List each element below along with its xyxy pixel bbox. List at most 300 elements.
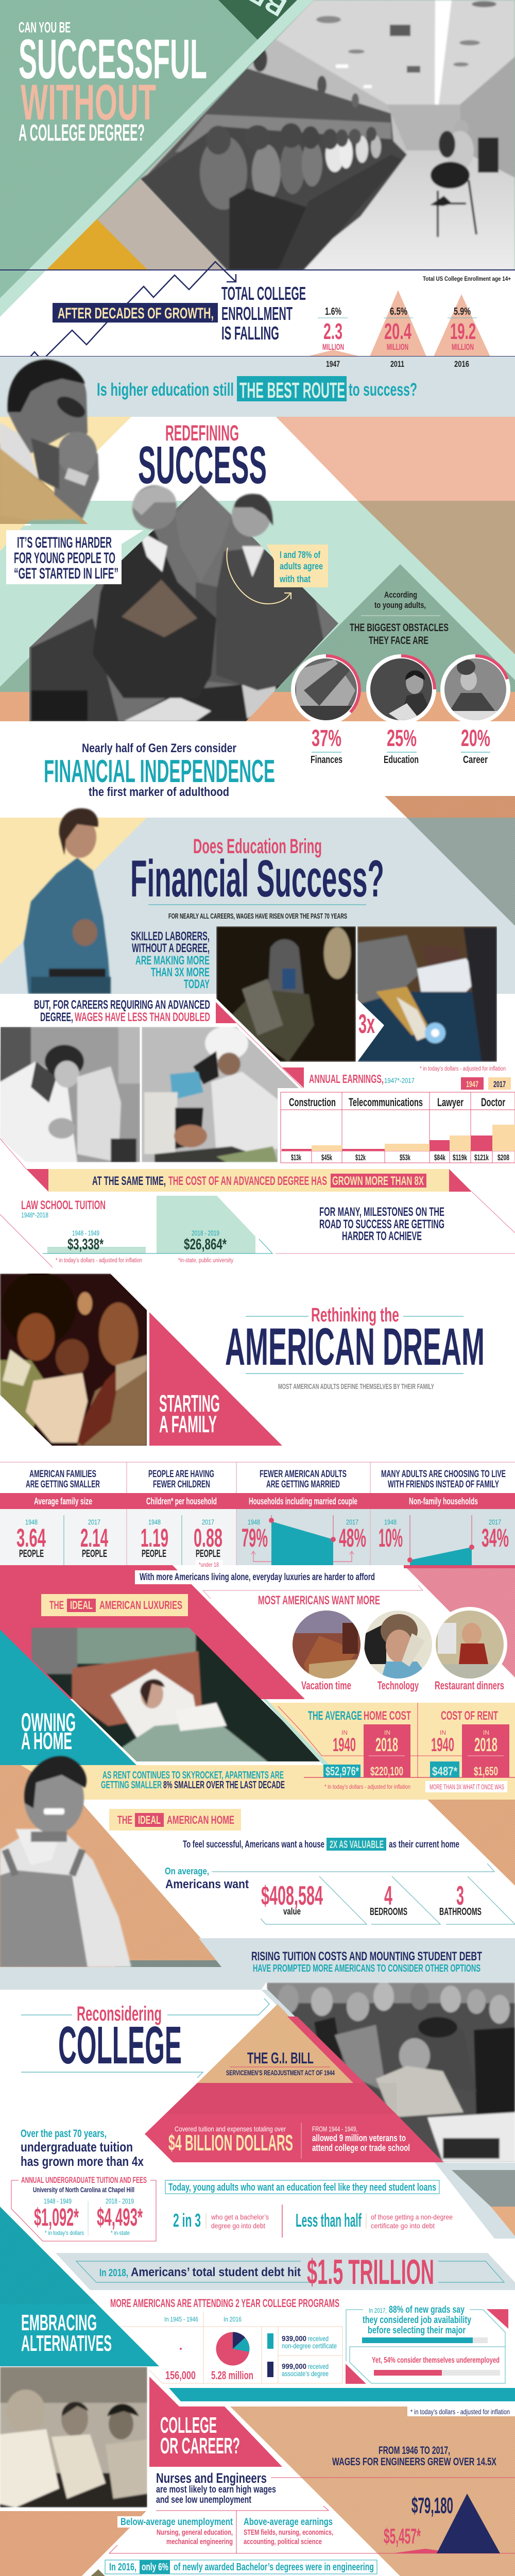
family statistics table: Non-family households: [409, 1496, 478, 1506]
owning a home label: [21, 1708, 76, 1754]
heading: COLLEGE: [58, 2015, 182, 2075]
nurses and engineers: Nursing, general education,: [157, 2528, 233, 2537]
hero title: WITHOUT: [21, 74, 156, 130]
advanced degree statement: [34, 998, 210, 1024]
stat: children per household: 0.88: [194, 1523, 222, 1552]
stat: children per household: PEOPLE: [196, 1548, 220, 1560]
owning a home label: A HOME: [21, 1727, 72, 1754]
photo: two men talking: [26, 484, 345, 726]
two-year programs chart: associate’s degree: [282, 2369, 329, 2378]
engineer wage statement: [332, 2445, 496, 2468]
two-year programs chart: [110, 2297, 342, 2383]
annual earnings bar chart: $119k: [453, 1154, 467, 1162]
obstacle: career: [440, 654, 510, 766]
tuition table: $4,493*: [97, 2204, 143, 2231]
family statistics table: FEWER AMERICAN ADULTS: [260, 1469, 347, 1480]
white strip: [0, 721, 515, 818]
annual earnings bar chart: 2017: [493, 1079, 506, 1089]
engineering degrees statement: [105, 2560, 377, 2574]
photo: welder in the dark: [216, 926, 356, 1062]
stat: married households area chart: 1948: [248, 1518, 260, 1526]
stat: family size: [16, 1518, 108, 1560]
obstacles text: THEY FACE ARE: [369, 635, 428, 647]
stat: married households area chart: 2017: [346, 1518, 358, 1526]
cost banner: GROWN MORE THAN 8X: [332, 1174, 424, 1188]
ideal luxuries label: THE: [49, 1599, 64, 1612]
advanced degree statement: DEGREE,: [40, 1010, 73, 1024]
G.I. Bill pyramid: Covered tuition and expenses totaling over: [175, 2125, 286, 2133]
heading: Rethinking the: [311, 1304, 399, 1326]
annual earnings bar chart: $12k: [355, 1154, 366, 1162]
job availability panel: before selecting their major: [368, 2325, 466, 2336]
enrollment stats: 2.3: [323, 319, 342, 344]
rent statement: GETTING SMALLER: [101, 1780, 162, 1791]
redefining success panel: [0, 360, 515, 818]
hero panel: SUCCESSFUL: [19, 28, 207, 91]
financial independence statement: Nearly half of Gen Zers consider: [82, 741, 236, 755]
photo: family portrait: [0, 1272, 149, 1449]
question text: THE BEST ROUTE: [239, 378, 345, 403]
tuition table: * in-state: [111, 2229, 130, 2236]
stat: family size: PEOPLE: [82, 1548, 107, 1560]
two-year programs chart: 999,000: [282, 2362, 306, 2371]
skilled laborers text: WITHOUT A DEGREE,: [132, 941, 210, 955]
annual earnings bar chart: 1947*-2017: [384, 1076, 415, 1084]
enrollment panel: [0, 262, 515, 357]
law school tuition chart: LAW SCHOOL TUITION: [21, 1198, 106, 1212]
ideal home panel: [0, 1747, 515, 1990]
stat: family size: 1948: [25, 1518, 38, 1526]
stat: non-family households area chart: 1948: [384, 1518, 397, 1526]
photo: student in denim shirt: [24, 808, 111, 994]
tuition table: [11, 2175, 156, 2241]
two-year programs chart: 939,000: [282, 2334, 306, 2343]
G.I. Bill pyramid: SERVICEMEN’S READJUSTMENT ACT OF 1944: [226, 2069, 335, 2077]
milestones statement: FOR MANY, MILESTONES ON THE: [319, 1205, 444, 1219]
yellow triangle: [46, 219, 148, 270]
ideal luxuries label: IDEAL: [70, 1599, 93, 1612]
pink wedge accent: [0, 1002, 515, 1267]
callout: 78% agree: I and 78% of: [280, 550, 321, 560]
callout: 78% agree: [267, 545, 328, 587]
owning a home label: OWNING: [21, 1708, 76, 1737]
family statistics table: PEOPLE ARE HAVING: [148, 1469, 214, 1480]
stat: married households area chart: [242, 1515, 366, 1565]
tan textile triangle: [41, 179, 227, 270]
rent callout: [425, 1781, 507, 1792]
engineer wages triangles: [384, 2493, 500, 2553]
annual earnings bar chart: [281, 1066, 515, 1163]
law school tuition chart: $26,864*: [184, 1236, 227, 1253]
statement: living alone: [135, 1570, 375, 1584]
job availability panel: In 2017,: [369, 2307, 387, 2314]
americans want stats: BATHROOMS: [439, 1906, 482, 1918]
enrollment stats: [318, 306, 477, 352]
family statistics table: FEWER CHILDREN: [153, 1479, 210, 1490]
nurses and engineers: STEM fields, nursing, economics,: [244, 2528, 333, 2537]
photo: modern microscope scientist: [142, 1026, 301, 1162]
job availability panel: 88% of new grads say: [389, 2304, 465, 2315]
G.I. Bill pyramid: FROM 1944 - 1949,: [312, 2125, 357, 2133]
home cost heading: [308, 1709, 498, 1723]
stat: family size: PEOPLE: [19, 1548, 44, 1560]
headline continuation: IS FALLING: [221, 323, 279, 344]
enrollment stats: 5.9%: [454, 306, 471, 317]
inflation note: * in today’s dollars - adjusted for inflation: [324, 1783, 410, 1790]
home cost columns: IN: [384, 1729, 390, 1736]
obstacles text: to young adults,: [374, 600, 426, 610]
nurses and engineers: Above-average earnings: [244, 2517, 333, 2528]
stat: family size: 3.64: [16, 1523, 46, 1552]
nurses and engineers: Below-average unemployment: [121, 2517, 233, 2528]
diagonal mint band: [0, 0, 314, 317]
obstacles text: [350, 590, 449, 647]
americans want stats: BEDROOMS: [370, 1906, 407, 1918]
enrollment triangles chart: [307, 290, 490, 357]
photo: man with sunglasses: [0, 360, 99, 520]
tuition statement: [21, 2128, 144, 2169]
statement: living alone: With more Americans living alone, everyday luxuries are harder to afford: [140, 1572, 375, 1583]
photo: welder with torch: [91, 2569, 105, 2576]
statement: 2x as valuable: [183, 1838, 459, 1851]
question text: Is higher education still: [97, 380, 234, 400]
zigzag arrow: [30, 262, 236, 357]
skilled laborers text: [131, 929, 210, 991]
two-year programs chart: In 2016: [224, 2315, 242, 2323]
obstacle: finances: 37%: [312, 725, 341, 751]
debt stat: 2 in 3: [173, 2210, 269, 2231]
luxury: technology: Technology: [377, 1679, 419, 1692]
stat: children per household: 1.19: [141, 1523, 168, 1552]
headline box: AFTER DECADES OF GROWTH,: [58, 305, 214, 322]
stat: married households area chart: 48%: [339, 1523, 366, 1552]
home cost columns: $1,650: [474, 1765, 498, 1778]
engineering degrees statement: In 2016,: [109, 2562, 136, 2573]
stat: non-family households area chart: 10%: [379, 1523, 403, 1552]
skilled laborers text: SKILLED LABORERS,: [131, 929, 210, 943]
two-year programs chart: received: [308, 2334, 329, 2343]
obstacle: education: Education: [384, 754, 419, 766]
tuition table: * in today’s dollars: [45, 2229, 84, 2236]
stat: family size: 2017: [88, 1518, 100, 1526]
question text: [97, 376, 417, 403]
stat: non-family households area chart: [379, 1515, 509, 1565]
nurses and engineers: accounting, political science: [244, 2537, 322, 2546]
G.I. Bill pyramid: THE G.I. BILL: [247, 2049, 314, 2067]
tuition table: ANNUAL UNDERGRADUATE TUITION AND FEES: [21, 2175, 147, 2185]
annual earnings bar chart: Lawyer: [437, 1096, 464, 1109]
debt stat: less than half: of those getting a non-degree: [371, 2213, 453, 2221]
callout: getting started: “GET STARTED IN LIFE”: [14, 565, 118, 582]
hero title: CAN YOU BE: [19, 20, 71, 36]
home cost columns: IN: [440, 1729, 446, 1736]
debt stat: less than half: certificate go into debt: [371, 2222, 435, 2230]
enrollment stats: MILLION: [387, 342, 408, 352]
tuition table: 2018 - 2019: [106, 2197, 134, 2205]
law school tuition chart: [21, 1196, 272, 1264]
hero panel: [0, 0, 515, 269]
home cost columns: [323, 1724, 509, 1778]
hero title: [19, 20, 207, 146]
headline box: [53, 303, 218, 323]
advanced degree statement: BUT, FOR CAREERS REQUIRING AN ADVANCED: [34, 998, 210, 1012]
men heads above the photo cut: [132, 485, 273, 582]
americans want stats: 3: [456, 1881, 464, 1911]
debt stat: 2 in 3: who get a bachelor’s: [211, 2213, 269, 2221]
engineering degrees statement: only 6%: [142, 2562, 168, 2573]
law school tuition chart: *in-state, public university: [178, 1258, 233, 1264]
headline continuation: ENROLLMENT: [221, 303, 293, 324]
cost banner: THE COST OF AN ADVANCED DEGREE HAS: [168, 1174, 327, 1188]
obstacle: career: 20%: [461, 725, 490, 751]
heading: SUCCESS: [138, 435, 267, 495]
annual earnings bar chart: $45k: [321, 1154, 332, 1162]
stat: children per household: 2017: [202, 1518, 214, 1526]
photo: three men at a chalkboard: [0, 2367, 147, 2507]
obstacle: career: Career: [463, 754, 488, 766]
callout: getting started: [6, 530, 144, 584]
financial independence statement: [44, 741, 275, 799]
engineer wage statement: FROM 1946 TO 2017,: [379, 2445, 450, 2456]
americans want stats: Americans want: [165, 1877, 249, 1891]
americans want stats: $408,584: [261, 1881, 323, 1911]
photo: vintage microscope scientist: [0, 1027, 140, 1162]
skilled laborers text: TODAY: [184, 977, 210, 991]
heading: most americans want more: MOST AMERICANS WANT MORE: [258, 1594, 380, 1607]
job availability panel: they considered job availability: [363, 2315, 471, 2326]
cost banner: AT THE SAME TIME,: [92, 1174, 166, 1188]
law school tuition chart: 2018 - 2019: [192, 1229, 219, 1237]
obstacle: finances: Finances: [311, 754, 342, 766]
tuition statement: has grown more than 4x: [21, 2154, 144, 2169]
enrollment stats: MILLION: [452, 342, 474, 352]
callout: getting started: FOR YOUNG PEOPLE TO: [14, 550, 115, 567]
tuition statement: undergraduate tuition: [21, 2139, 133, 2155]
annual earnings bar chart: $53k: [400, 1154, 410, 1162]
ideal luxuries label: AMERICAN LUXURIES: [99, 1599, 182, 1612]
white lower area: [0, 994, 515, 1274]
engineering degrees statement: of newly awarded Bachelor’s degrees were in engineering: [174, 2562, 374, 2573]
section label: ALTERNATIVES: [21, 2331, 112, 2356]
G.I. Bill pyramid: [145, 2004, 443, 2162]
family statistics table: [0, 1462, 515, 1565]
annual earnings bar chart: $13k: [291, 1154, 301, 1162]
american dream panel: [0, 1272, 485, 1449]
annual earnings bar chart: ANNUAL EARNINGS,: [309, 1072, 384, 1086]
heading: MOST AMERICAN ADULTS DEFINE THEMSELVES BY THEIR FAMILY: [278, 1383, 434, 1391]
law school tuition chart: 1948 - 1949: [72, 1229, 99, 1237]
home cost columns: $52,976*: [325, 1765, 359, 1778]
tuition statement: Over the past 70 years,: [21, 2128, 107, 2140]
cost banner: [26, 1169, 472, 1192]
heading: [138, 421, 267, 495]
callout: 78% agree: adults agree: [280, 561, 323, 571]
heading: [21, 1998, 269, 2078]
family statistics table: ARE GETTING SMALLER: [26, 1479, 100, 1490]
starting a family tab: STARTING: [159, 1390, 220, 1417]
starting a family tab: [149, 1312, 282, 1446]
headline continuation: [221, 283, 306, 344]
skilled laborers text: THAN 3X MORE: [151, 965, 210, 979]
annual earnings bar chart: $84k: [434, 1154, 445, 1162]
annual earnings bar chart: Construction: [289, 1096, 336, 1109]
reconsidering college panel: [11, 1982, 515, 2241]
americans want stats: value: [283, 1906, 301, 1917]
section label: EMBRACING: [21, 2310, 97, 2335]
family statistics table: Average family size: [34, 1496, 92, 1506]
skilled laborers text: ARE MAKING MORE: [135, 954, 210, 968]
G.I. Bill pyramid: $4 BILLION DOLLARS: [168, 2130, 293, 2156]
student debt band: [56, 2252, 515, 2292]
big 3x label: 3x: [358, 1009, 375, 1039]
rent statement: AS RENT CONTINUES TO SKYROCKET, APARTMENTS ARE: [102, 1770, 284, 1781]
nurses and engineers: mechanical engineering: [166, 2537, 233, 2546]
question text: to success?: [349, 380, 417, 400]
student debt band: In 2018,: [99, 2267, 128, 2279]
curved arrow: [227, 548, 291, 604]
obstacle: finances: [291, 654, 361, 766]
home cost columns: $220,100: [370, 1765, 403, 1778]
luxury: vacation time: [291, 1610, 363, 1692]
home cost panel: [0, 1699, 515, 1800]
section label: [21, 2310, 112, 2356]
stat: married households area chart: 79%: [242, 1523, 268, 1552]
enrollment stats: 6.5%: [390, 306, 407, 317]
obstacle: education: [366, 654, 436, 766]
callout: getting started: IT’S GETTING HARDER: [17, 534, 112, 551]
engineer wages triangles: $5,457*: [384, 2524, 421, 2548]
tuition table: 1948 - 1949: [44, 2197, 72, 2205]
student loans statement: [165, 2180, 439, 2194]
financial independence statement: the first marker of adulthood: [89, 785, 229, 799]
hero photo: switchboard operators: [140, 0, 515, 269]
question band: [0, 357, 515, 417]
rent statement: 8% SMALLER OVER THE LAST DECADE: [163, 1780, 285, 1791]
obstacles text: According: [384, 590, 417, 600]
debt stat: 2 in 3: degree go into debt: [211, 2222, 265, 2230]
home cost columns: $487*: [432, 1765, 458, 1778]
stat: children per household: [141, 1518, 222, 1560]
statement: 2x as valuable: To feel successful, Americans want a house: [183, 1839, 324, 1850]
college or career tab: OR CAREER?: [160, 2433, 240, 2459]
dark green corner triangle with rotated word: [218, 0, 297, 40]
hero title: A COLLEGE DEGREE?: [19, 120, 145, 146]
enrollment stats: 19.2: [450, 319, 476, 344]
two-year programs chart: non-degree certificate: [282, 2342, 337, 2350]
nurses and engineers: [109, 2470, 515, 2553]
stat: children per household: PEOPLE: [142, 1548, 166, 1560]
college or career tab: [149, 2377, 282, 2467]
nurses and engineers: Nurses and Engineers: [156, 2470, 267, 2486]
nurses and engineers: are most likely to earn high wages: [156, 2484, 276, 2495]
year labels: 2016: [454, 359, 469, 369]
annual earnings bar chart: $121k: [474, 1154, 489, 1162]
family statistics table: ARE GETTING MARRIED: [266, 1479, 340, 1490]
home cost heading: THE AVERAGE: [308, 1709, 362, 1723]
family statistics table: AMERICAN FAMILIES: [29, 1469, 96, 1480]
heading: [130, 835, 384, 908]
two-year programs chart: 5.28 million: [211, 2369, 253, 2382]
photo: welder close-up: [357, 926, 497, 1062]
year labels: 1947: [326, 359, 340, 369]
stat: family size: 2.14: [80, 1523, 108, 1552]
statement: 2x as valuable: 2X AS VALUABLE: [330, 1839, 384, 1851]
americans want stats: [165, 1863, 515, 1924]
americans want stats: On average,: [165, 1866, 209, 1876]
college or career panel: [0, 2367, 515, 2576]
enrollment stats: 1.6%: [325, 306, 341, 317]
year labels: [326, 359, 469, 369]
home cost columns: IN: [341, 1729, 348, 1736]
law school tuition chart: 1948*-2018: [21, 1211, 48, 1219]
annual earnings bar chart: 1947: [466, 1079, 478, 1089]
ideal luxuries label: [41, 1594, 188, 1616]
year labels: 2011: [390, 359, 404, 369]
G.I. Bill pyramid: allowed 9 million veterans to: [312, 2133, 406, 2143]
photo: FDR signing the G.I. Bill: [267, 1982, 515, 2163]
home cost heading: HOME COST: [364, 1709, 411, 1723]
callout: 78% agree: with that: [279, 574, 311, 584]
advanced degree statement: WAGES HAVE LESS THAN DOUBLED: [75, 1010, 210, 1024]
obstacle: education: 25%: [387, 725, 417, 751]
ideal home label: [109, 1809, 241, 1831]
americans want stats: 4: [384, 1881, 392, 1911]
milestones statement: [319, 1205, 444, 1243]
two-year programs chart: received: [308, 2362, 329, 2370]
headline continuation: TOTAL COLLEGE: [221, 283, 306, 304]
photo: smiling man in overalls: [0, 1756, 131, 1967]
obstacles text: THE BIGGEST OBSTACLES: [350, 622, 449, 634]
two-year programs chart: 156,000: [165, 2369, 196, 2382]
milestones statement: HARDER TO ACHIEVE: [342, 1229, 422, 1243]
family statistics table: Children* per household: [146, 1496, 217, 1506]
enrollment stats: MILLION: [322, 342, 344, 352]
nurses and engineers: and see low unemployment: [156, 2495, 251, 2505]
G.I. Bill pyramid: attend college or trade school: [312, 2143, 410, 2153]
heading: [225, 1304, 485, 1391]
law school tuition chart: * in today’s dollars - adjusted for inflation: [56, 1258, 142, 1264]
college or career tab: COLLEGE: [160, 2413, 217, 2438]
job availability panel: [346, 2304, 508, 2384]
financial success panel: [0, 796, 515, 994]
tuition table: $1,092*: [34, 2204, 79, 2231]
home cost columns: 1940: [431, 1734, 454, 1755]
photo: woman in bed: [31, 1628, 324, 1765]
embracing alternatives panel: [0, 2207, 515, 2401]
luxury: vacation time: Vacation time: [301, 1679, 351, 1692]
heading: Does Education Bring: [193, 835, 322, 858]
right-edge texture shapes: [435, 2163, 515, 2239]
law school tuition chart: $3,338*: [67, 1236, 104, 1253]
luxury: restaurant dinners: [432, 1607, 507, 1692]
luxuries panel: [0, 1560, 515, 1765]
tuition table: University of North Carolina at Chapel Hill: [33, 2185, 134, 2194]
engineer wages triangles: $79,180: [411, 2493, 453, 2518]
student debt band: Americans’ total student debt hit: [131, 2265, 301, 2279]
ideal home label: AMERICAN HOME: [167, 1814, 234, 1826]
home cost columns: IN: [483, 1729, 489, 1736]
financial independence statement: FINANCIAL INDEPENDENCE: [44, 754, 275, 789]
subheading: FOR NEARLY ALL CAREERS, WAGES HAVE RISEN OVER THE PAST 70 YEARS: [168, 912, 347, 921]
two-year programs chart: In 1945 - 1946: [164, 2315, 198, 2323]
annual earnings bar chart: Telecommunications: [349, 1096, 423, 1109]
heading: Reconsidering: [77, 2003, 162, 2025]
statement: 2x as valuable: as their current home: [389, 1839, 459, 1850]
debt stat: less than half: Less than half: [296, 2210, 362, 2231]
ideal home label: IDEAL: [138, 1814, 161, 1826]
luxury: technology: [363, 1610, 435, 1692]
starting a family tab: A FAMILY: [159, 1411, 217, 1437]
